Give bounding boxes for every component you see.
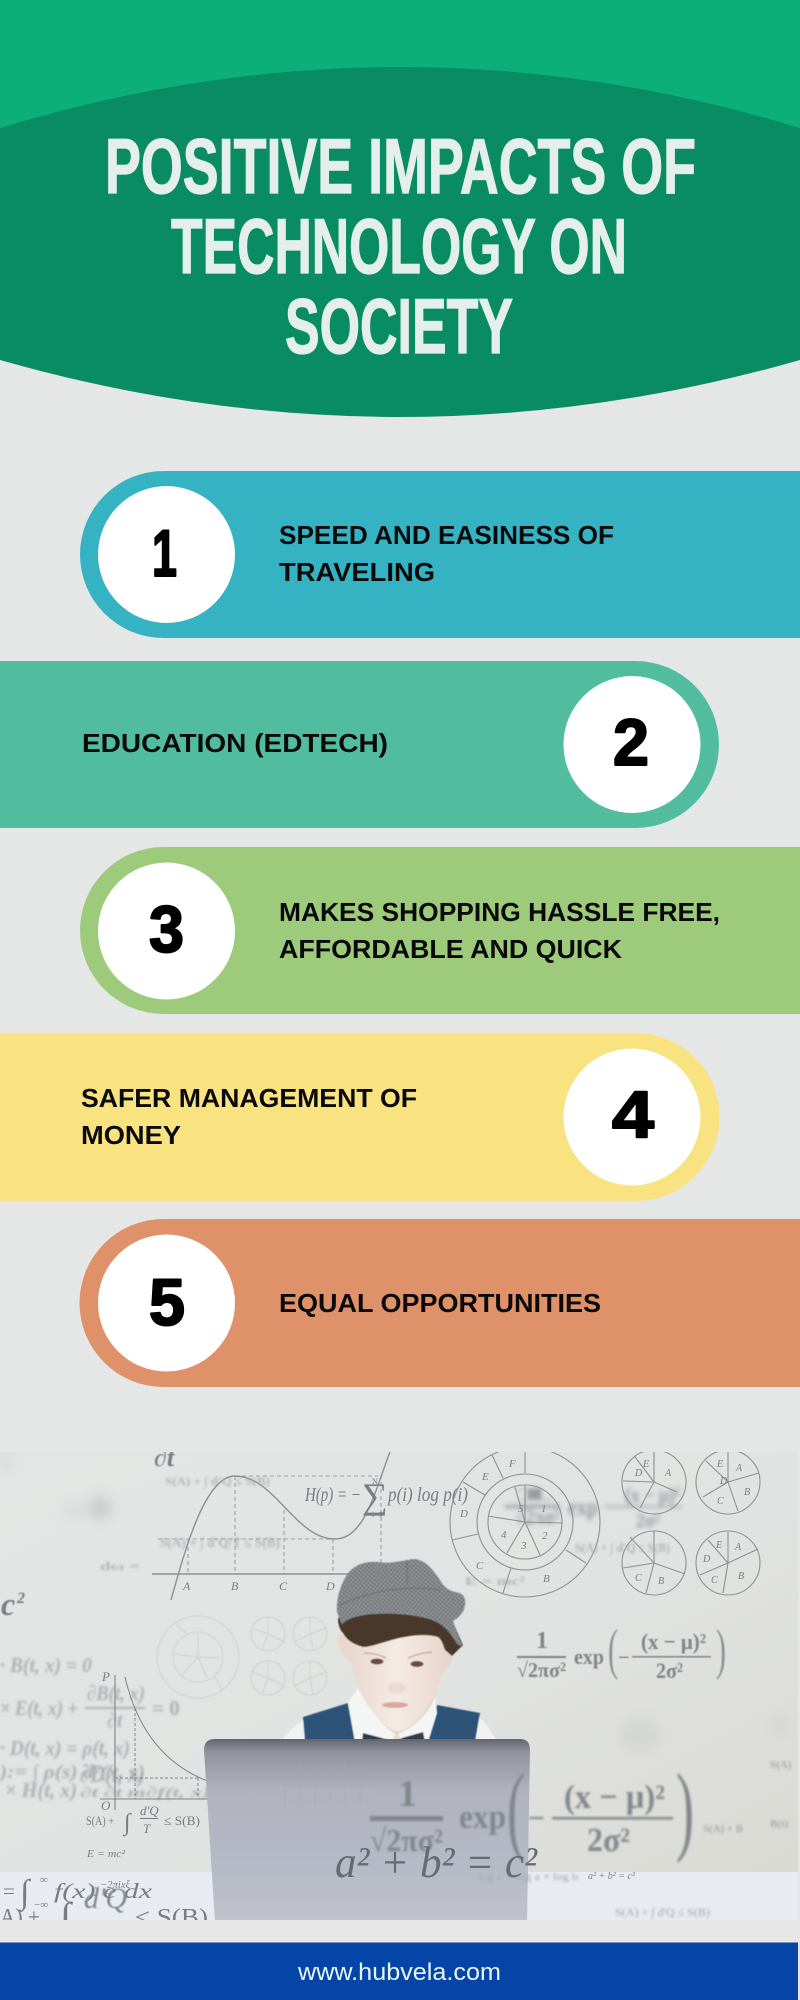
pie wheel labels [459, 1458, 550, 1585]
formula: blurred gaussian top right: exp [568, 1495, 598, 1521]
number 5: 5 [149, 1265, 185, 1339]
formula: entropy: p(i) log p(i) [386, 1484, 468, 1506]
formula: fourier on desk: A) + [0, 1905, 40, 1931]
small pie labels: B [744, 1487, 750, 1498]
formula: blurred Maxwell equations: · D(t, x) = ρ(t, x) [0, 1736, 130, 1760]
chart labels P O V: P [101, 1669, 110, 1684]
smudges [82, 1495, 653, 1745]
formula: entropy: i=1 [372, 1510, 383, 1519]
formula: desk small text: log c = log a + log b [478, 1871, 579, 1883]
formula: gaussian middle right: ) [716, 1619, 726, 1681]
formula: large gaussian overlay: (x − μ)² [564, 1779, 665, 1816]
small pie charts [622, 1450, 760, 1595]
pie wheel labels: F [508, 1458, 516, 1470]
small pie labels: A [735, 1463, 743, 1474]
boy cap [337, 1559, 465, 1647]
formula: blurred Maxwell equations: ∂D(t, x) [80, 1761, 145, 1788]
boy ear [338, 1633, 352, 1663]
small pie labels: E [716, 1459, 723, 1470]
formula: desk small text: S(A) + ∫ d'Q ≤ S(B) [615, 1905, 710, 1919]
boy neck [384, 1694, 436, 1738]
text: speed and easiness of traveling: TRAVELING [279, 557, 435, 587]
formula: fourier on desk: −∞ [34, 1899, 48, 1911]
formula: fourier on desk: ∫ [57, 1894, 74, 1941]
boy bow tie [362, 1732, 425, 1739]
chart: decay curve [100, 1675, 208, 1810]
small pie labels: B [738, 1571, 744, 1582]
photo: boy with laptop and math formulas [0, 1443, 798, 1941]
formula: entropy inequality and E=mc2: ≤ S(B) [164, 1813, 200, 1828]
small pie labels: A [734, 1542, 742, 1553]
number circle 4 [564, 1048, 700, 1186]
footer bar [0, 1942, 798, 2000]
formula: blurred Maxwell equations: ∂B(t, x) [87, 1681, 145, 1705]
panel: item 5 [80, 1219, 800, 1387]
number 3: 3 [149, 892, 184, 966]
panel: item 1 [80, 471, 800, 638]
text: shopping [279, 897, 720, 964]
formula: large gaussian overlay: 2σ² [587, 1822, 630, 1859]
boy sleeves [283, 1716, 496, 1739]
formula: blurred Maxwell equations: · B(t, x) = 0 [0, 1653, 92, 1677]
small pie labels: D [719, 1476, 728, 1487]
title [105, 122, 696, 370]
pie wheel labels: 3 [520, 1540, 527, 1552]
formula: blurred Maxwell equations: ∂t [107, 1710, 124, 1732]
text: money: MONEY [81, 1120, 181, 1150]
formula: blurred integrals: dω = [100, 1559, 140, 1573]
pie wheel labels: D [459, 1508, 468, 1520]
formula: blurred gaussian top right: 2σ² [636, 1510, 660, 1532]
chart labels P O V: O [101, 1798, 111, 1813]
pill 3 [80, 847, 800, 1014]
formula: blurred right marks: S(A) [770, 1759, 792, 1771]
formula: gaussian middle right: √2πσ² [517, 1658, 566, 1682]
small pie labels: D [634, 1468, 643, 1479]
formula: blurred right marks: S(A) + B [703, 1823, 744, 1835]
boy shirt collar [348, 1688, 437, 1742]
photo desk [0, 1872, 798, 1920]
formula: blurred gaussian top right: √2πσ² [515, 1504, 560, 1529]
pie wheel labels: 2 [542, 1530, 548, 1542]
formula: large gaussian overlay: ( [507, 1753, 525, 1864]
number 1: 1 [152, 516, 177, 590]
text: equal opportunities: EQUAL OPPORTUNITIES [279, 1288, 601, 1318]
pill 5 [80, 1219, 800, 1387]
boy eyes and brows [364, 1652, 432, 1667]
footer url: www.hubvela.com [297, 1959, 501, 1986]
formula: gaussian middle right: 1 [536, 1628, 548, 1654]
small pie labels: C [717, 1496, 724, 1507]
formula: partial t and c squared: ∂t [154, 1443, 175, 1472]
formula: blurred integrals [100, 1474, 670, 1588]
formula: desk small text [478, 1870, 710, 1919]
formula: entropy inequality and E=mc2: T [143, 1821, 151, 1836]
formula: partial t and c squared [1, 1443, 175, 1622]
chart labels A B C D: A [182, 1579, 191, 1593]
formula: large gaussian overlay: − [528, 1802, 545, 1835]
pie wheel labels: C [476, 1560, 484, 1572]
formula: gaussian middle right: ( [608, 1619, 618, 1681]
photo wall [528, 1604, 798, 1872]
boy [280, 1559, 497, 1742]
chart labels A B C D [182, 1582, 334, 1590]
small pie labels: C [711, 1575, 718, 1586]
formula: fourier on desk: ∫ [18, 1874, 32, 1913]
chart labels P O V: V [224, 1798, 234, 1813]
formula: gaussian middle right: 2σ² [656, 1658, 683, 1683]
number circle 3 [98, 862, 235, 1000]
small pie labels: C [635, 1573, 642, 1584]
footer strip [0, 1920, 800, 1943]
number 4: 4 [612, 1077, 654, 1151]
small pie labels: E [715, 1540, 722, 1551]
formula: gaussian middle right: − [618, 1647, 629, 1669]
formula: fourier on desk: = [3, 1879, 15, 1903]
chart labels A B C D: B [231, 1579, 239, 1593]
formula: blurred Maxwell equations: × E(t, x) + [0, 1696, 78, 1720]
formula: entropy [304, 1478, 468, 1517]
pie wheel labels: B [543, 1573, 550, 1585]
boy face [352, 1634, 454, 1731]
formula: large gaussian overlay [369, 1772, 693, 1864]
formula: blurred Maxwell equations: ∂t ∂t m∂f(t, x) [80, 1786, 210, 1801]
formula: fourier on desk: −2πixξ [100, 1879, 130, 1891]
number circle 1 [98, 486, 235, 623]
small pie labels [634, 1459, 750, 1587]
text: shopping: AFFORDABLE AND QUICK [279, 934, 622, 964]
formula: fourier on desk: ≤ S(B) [135, 1905, 208, 1931]
text: speed and easiness of traveling: SPEED AND EASINESS OF [279, 520, 614, 550]
formula: entropy inequality and E=mc2 [86, 1806, 200, 1857]
formula: fourier on desk [0, 1874, 208, 1941]
formula: blurred integrals: S(A) + ∫ d'Q ≤ S(B) [165, 1474, 270, 1488]
formula: entropy inequality and E=mc2: E = mc² [86, 1848, 126, 1860]
formula: blurred Maxwell equations: ):= ∫ ρ(s) d²(x, s) [0, 1762, 145, 1784]
text: speed and easiness of traveling [279, 520, 614, 587]
formula: pythagoras: a² + b² = c² [335, 1838, 538, 1887]
text: money [81, 1083, 417, 1150]
small pie labels: B [658, 1576, 664, 1587]
small pie labels: A [664, 1468, 672, 1479]
formula: gaussian middle right [516, 1629, 726, 1680]
header ellipse [0, 67, 800, 417]
boy nose shadow and mouth [382, 1682, 408, 1708]
pill 2 [0, 661, 719, 828]
formula: blurred integrals: S(A) + ∫ d'Q ≤ S(B) [575, 1540, 670, 1556]
formula: fourier on desk: f(x) e dx [54, 1879, 153, 1903]
laptop [204, 1739, 530, 1922]
formula: blurred integrals: S(A) + ∫ d'Q/T ≤ S(B) [160, 1536, 280, 1551]
formula: blurred Maxwell equations [0, 1653, 210, 1802]
formula: fourier on desk: d'Q [84, 1882, 127, 1915]
number 2: 2 [613, 705, 649, 779]
pie wheel labels: 5 [518, 1503, 524, 1515]
formula: entropy inequality and E=mc2: d'Q [140, 1803, 159, 1818]
small pie labels: D [702, 1554, 711, 1565]
panel: item 3 [80, 847, 800, 1014]
boy vest [303, 1703, 480, 1742]
formula: partial t and c squared: c [1, 1586, 15, 1622]
formula: fourier on desk: ∞ [40, 1874, 48, 1886]
formula: gaussian middle right: (x − μ)² [641, 1629, 706, 1654]
formula: entropy: ∑ [362, 1476, 388, 1516]
chart: curve graph [152, 1452, 390, 1600]
panel: item 2 [0, 661, 719, 828]
laptop screen grid [285, 1760, 372, 1810]
pie wheel labels: 1 [541, 1503, 546, 1515]
formula: large gaussian overlay: exp [459, 1799, 506, 1836]
header band [0, 0, 800, 240]
formula: blurred gaussian top right: 1 [508, 1484, 558, 1504]
pie wheel labels: E [481, 1471, 489, 1483]
formula: blurred right marks [703, 1759, 792, 1835]
number circle 2 [564, 676, 700, 813]
text: shopping: MAKES SHOPPING HASSLE FREE, [279, 897, 720, 927]
title: SOCIETY [285, 282, 513, 370]
text: education: EDUCATION (EDTECH) [82, 728, 388, 758]
formula: large gaussian overlay: ) [676, 1753, 694, 1864]
number circle 5 [98, 1234, 235, 1372]
formula: entropy inequality and E=mc2: S(A) + [86, 1813, 114, 1828]
small pie labels: E [642, 1459, 649, 1470]
pie wheel labels: 4 [501, 1529, 507, 1541]
formula: large gaussian overlay: 1 [398, 1773, 417, 1815]
formula: blurred gaussian top right: (x − μ)² [625, 1482, 680, 1507]
formula: blurred Maxwell equations: × H(t, x) [5, 1778, 77, 1802]
formula: large gaussian overlay: √2πσ² [370, 1822, 443, 1858]
laptop shell [204, 1739, 530, 1922]
formula: gaussian middle right: exp [574, 1644, 604, 1669]
formula: entropy inequality and E=mc2: ∫ [122, 1810, 132, 1837]
pie wheel right [450, 1447, 600, 1597]
panel: item 4 [0, 1033, 720, 1201]
formula: blurred Maxwell equations: = 0 [152, 1696, 180, 1720]
faint pie charts left [157, 1616, 327, 1698]
chart labels P O V [102, 1672, 110, 1810]
formula: entropy: N [372, 1477, 378, 1486]
formula: partial t and c squared: 2 [16, 1590, 25, 1607]
chart labels A B C D: C [279, 1579, 288, 1593]
pill 1 [80, 471, 800, 638]
formula: blurred right marks: B(t) [770, 1818, 789, 1830]
pill 4 [0, 1033, 720, 1201]
formula: entropy: H(p) = − [304, 1484, 361, 1506]
formula: blurred integrals: E = mc² [465, 1574, 526, 1588]
chart labels A B C D: D [325, 1579, 335, 1593]
formula: desk small text: a² + b² = c² [588, 1870, 636, 1882]
text: money: SAFER MANAGEMENT OF [81, 1083, 417, 1113]
boy cap seam [340, 1562, 440, 1605]
formula: blurred gaussian top right [503, 1486, 682, 1530]
boy hair [338, 1610, 463, 1656]
